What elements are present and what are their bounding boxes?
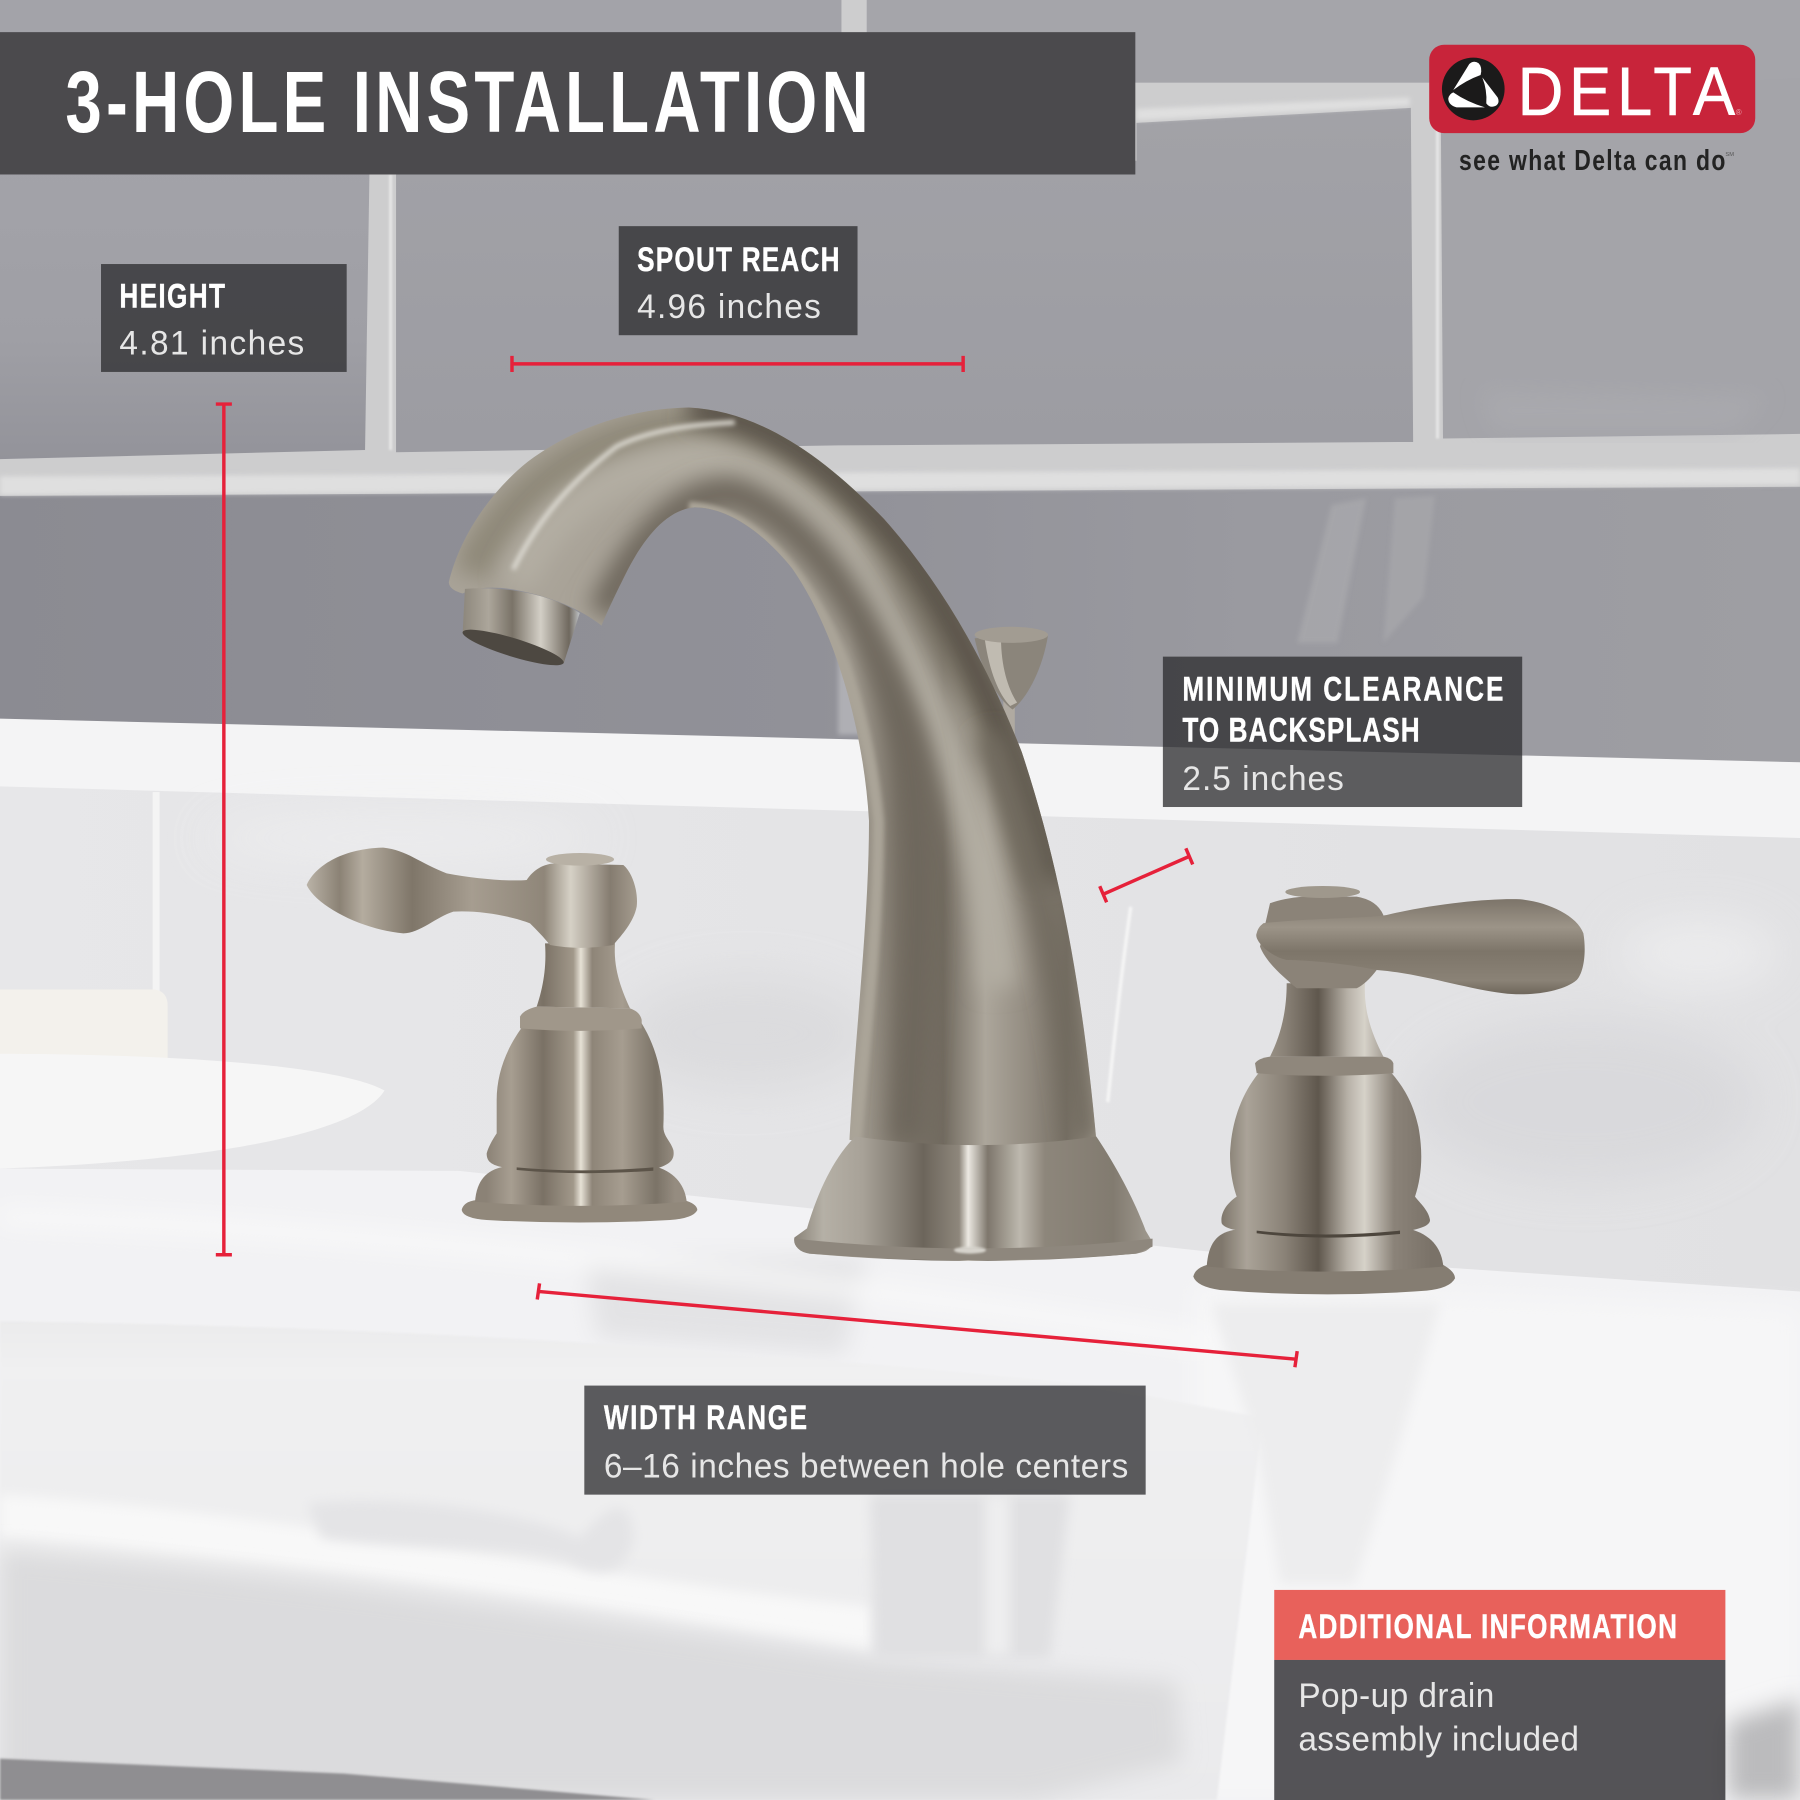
width range heading: WIDTH RANGE (604, 1399, 807, 1437)
outer arch tone (471, 422, 1039, 872)
right handle bell (1221, 1073, 1430, 1233)
spout reach value: 4.96 inches (637, 288, 821, 326)
additional information header (1274, 1590, 1725, 1660)
left handle base (475, 1167, 687, 1206)
height heading: HEIGHT (119, 277, 225, 316)
right handle collar (1255, 1057, 1393, 1076)
sink bowl (0, 1321, 1263, 1800)
logo wordmark: DELTA (1518, 53, 1735, 130)
left handle cap (546, 853, 614, 866)
logo registered mark: ® (1736, 108, 1742, 117)
additional information body (1274, 1660, 1725, 1800)
left handle lever (307, 848, 637, 948)
sharp highlight (513, 422, 735, 569)
left handle stem (537, 943, 630, 1008)
right handle base (1207, 1230, 1443, 1272)
clearance value: 2.5 inches (1182, 759, 1344, 798)
marble backsplash (0, 786, 1800, 1303)
additional information heading: ADDITIONAL INFORMATION (1298, 1608, 1677, 1646)
callout: minimum clearance (1163, 657, 1522, 807)
right handle stem (1270, 983, 1383, 1057)
counter top (0, 1169, 1800, 1800)
left handle bell (487, 1023, 674, 1169)
right handle lever (1256, 899, 1585, 994)
logo service mark: SM (1725, 152, 1734, 158)
callout: spout reach (619, 226, 858, 335)
height value: 4.81 inches (119, 324, 304, 363)
wall tiles (0, 0, 1800, 763)
left handle (307, 848, 697, 1223)
callout: width range (584, 1386, 1146, 1495)
wall grout (0, 0, 1800, 827)
inner arch tone (517, 459, 999, 987)
dimension line: height (216, 404, 232, 1255)
spout reach heading: SPOUT REACH (637, 241, 840, 279)
bowl lower shadow (0, 1550, 1182, 1800)
pop-up drain knob (975, 627, 1048, 746)
right handle (1193, 886, 1585, 1294)
backsplash ledge (0, 719, 1800, 855)
bottom shadow wedge (0, 1759, 654, 1800)
grout highlights (0, 98, 1800, 495)
soap dish (0, 1054, 385, 1169)
additional information text line two: assembly included (1298, 1720, 1579, 1759)
additional information text line one: Pop-up drain (1298, 1677, 1494, 1715)
dimension line: clearance (1100, 848, 1193, 902)
title banner (0, 32, 1135, 174)
dimension line: width range (537, 1283, 1297, 1367)
aerator (460, 588, 580, 672)
right handle flange (1193, 1265, 1455, 1294)
left handle flange (462, 1200, 697, 1223)
callout: height (101, 264, 347, 372)
bowl white stripe (0, 1495, 872, 1653)
logo tagline: see what Delta can do (1459, 143, 1725, 177)
rim marble streaks (0, 1217, 1217, 1355)
left handle collar (520, 1007, 642, 1031)
grout bright edges (389, 106, 1439, 450)
dimension line: spout reach (512, 356, 963, 372)
spout (449, 408, 1096, 1146)
clearance heading line two: TO BACKSPLASH (1182, 711, 1420, 749)
logo red plate (1429, 45, 1755, 133)
width range value: 6–16 inches between hole centers (604, 1447, 1128, 1486)
title text: 3-HOLE INSTALLATION (65, 54, 869, 151)
spout dome base (794, 1136, 1153, 1261)
Delta logo (1429, 45, 1755, 177)
right handle cap (1285, 886, 1360, 898)
faucet reflections (308, 1303, 1441, 1659)
clearance heading: MINIMUM CLEARANCE (1182, 670, 1503, 708)
panel: additional information (1274, 1590, 1725, 1800)
faucet (449, 408, 1153, 1261)
right handle head (1260, 897, 1383, 988)
logo emblem (1442, 58, 1505, 120)
soap block (0, 990, 168, 1062)
